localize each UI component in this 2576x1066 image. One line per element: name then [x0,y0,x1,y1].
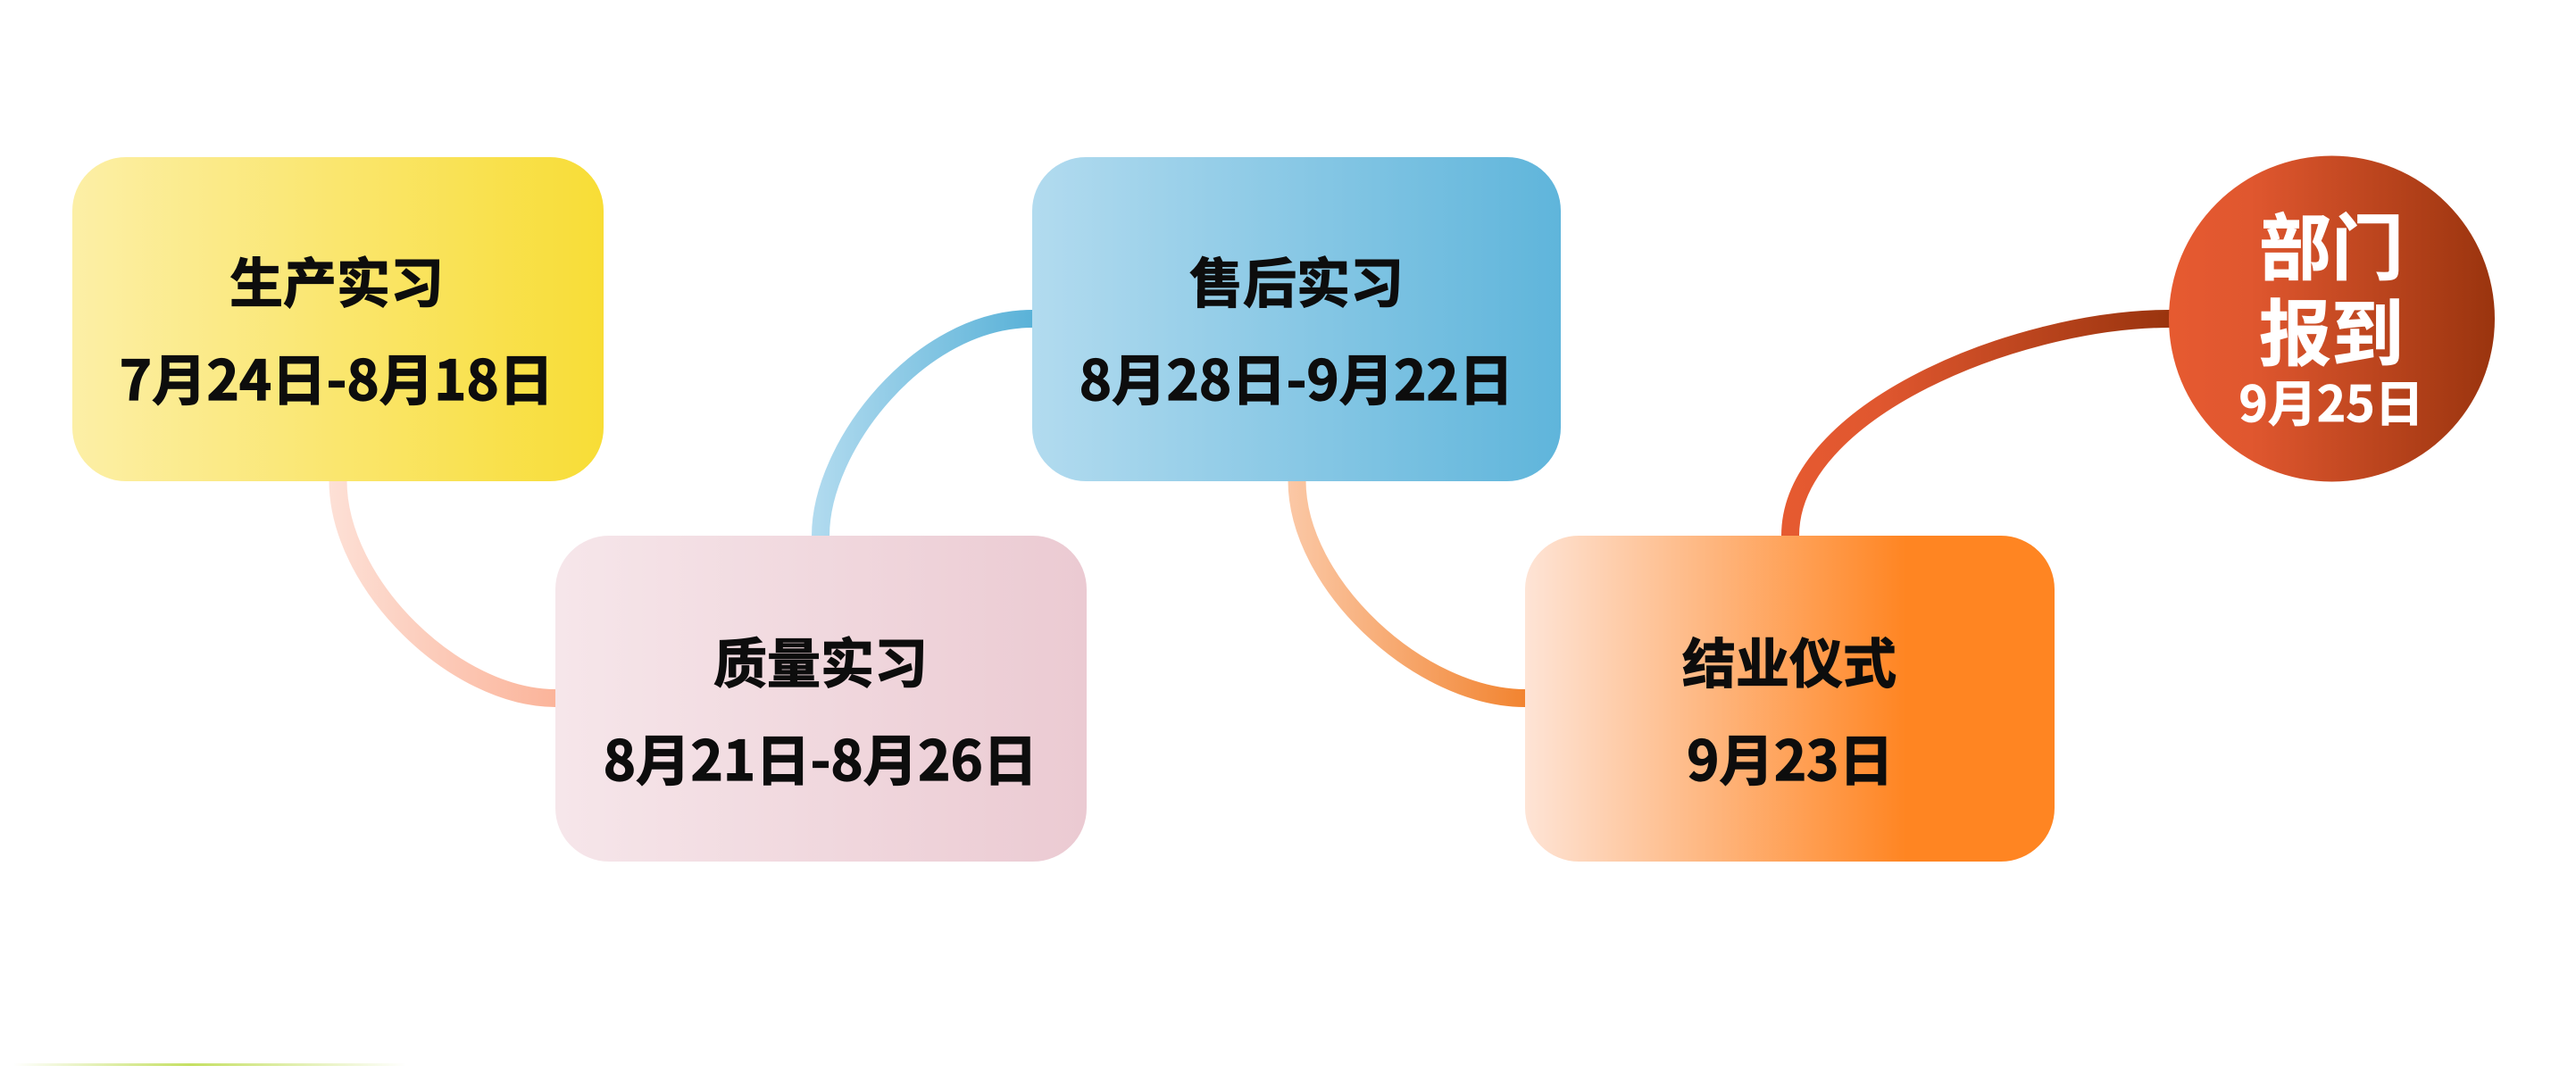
dates: after-sales internship: 8月28日-9月22日 [1080,337,1513,416]
heading: report: 报到 [2259,277,2404,381]
panel: production internship [72,157,604,481]
panel: after-sales internship [1032,157,1561,481]
connector: quality to after-sales [821,319,1032,536]
connector: production to quality [338,480,555,698]
panel: department report circle [2169,155,2495,482]
heading: production internship: 生产实习 [229,241,444,319]
dates: quality internship: 8月21日-8月26日 [604,717,1038,796]
decorative bottom green line [13,1063,406,1066]
heading: graduation ceremony: 结业仪式 [1682,621,1897,699]
heading: quality internship: 质量实习 [713,621,928,699]
dates: production internship: 7月24日-8月18日 [120,337,554,416]
connector: graduation to department report [1790,319,2170,536]
connector: after-sales to graduation [1296,480,1525,698]
heading: after-sales internship: 售后实习 [1189,241,1404,319]
heading: department: 部门 [2259,191,2404,296]
panel: quality internship [555,536,1087,862]
dates: graduation ceremony: 9月23日 [1687,717,1894,796]
dates: department report: 9月25日 [2238,364,2424,436]
panel: graduation ceremony [1525,536,2055,862]
